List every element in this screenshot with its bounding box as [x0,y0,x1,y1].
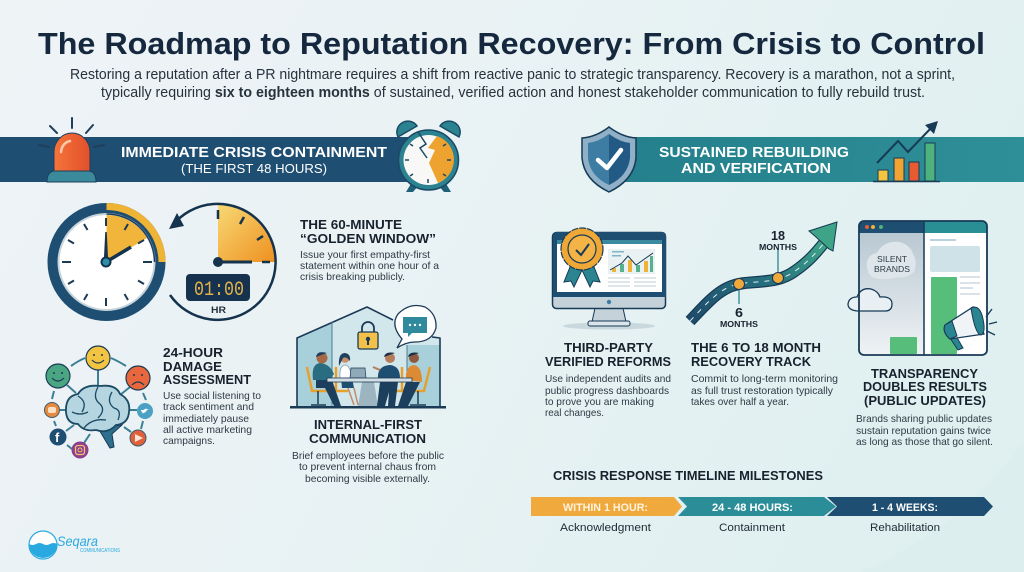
heading: timeline milestones: CRISIS RESPONSE TIMELINE MILESTONES [553,468,823,483]
illustration: internal meeting room [290,306,446,408]
icon: stopwatch countdown arc with digital display [169,204,276,320]
text block: 24-hour damage assessment: all active marketing [163,424,252,436]
intro text: Restoring a reputation after a PR nightmare requires a shift from reactive panic to strategic transparency. Recovery is a marathon, not a sprint, [70,67,955,83]
text block: third-party verified reforms: to prove you are making [545,396,654,408]
icon: clock with highlighted first hour [48,203,166,321]
text block: 60-minute golden window: THE 60-MINUTE [300,217,402,232]
text block: transparency doubles results: DOUBLES RESULTS [863,379,987,394]
logo: Seqara [57,533,98,549]
title: The Roadmap to Reputation Recovery: From Crisis to Control [38,26,985,61]
text block: transparency doubles results [856,366,993,448]
logo [29,531,121,559]
text block: transparency doubles results: (PUBLIC UPDATES) [864,393,986,408]
text block: 60-minute golden window: crisis breaking publicly. [300,271,405,283]
text block: 6 to 18 month recovery track: RECOVERY TRACK [691,354,812,369]
text block: internal-first communication: becoming visible externally. [305,473,430,485]
text block: 60-minute golden window: statement within one hour of a [300,260,439,272]
panel: sustained rebuilding banner: SUSTAINED REBUILDING [659,145,849,161]
chart: 6 to 18 month recovery road: MONTHS [720,320,759,329]
panel: sustained rebuilding banner: AND VERIFICATION [681,161,831,177]
timeline: crisis response chevrons [531,497,993,534]
text block: 60-minute golden window: Issue your first empathy-first [300,249,430,261]
text block: third-party verified reforms: Use independent audits and [545,373,671,385]
text block: 24-hour damage assessment: track sentiment and [163,401,254,413]
intro text [70,67,955,101]
text block: third-party verified reforms [545,340,671,419]
chevron: 1-4 weeks: 1 - 4 WEEKS: [872,502,938,514]
text block: 60-minute golden window [300,217,439,283]
icon: brain with sentiment and social network [44,346,153,458]
text block: internal-first communication: INTERNAL-FIRST [314,417,422,432]
panel: immediate crisis containment banner: (THE FIRST 48 HOURS) [181,161,327,176]
icon: cracked alarm clock [397,121,460,192]
chevron: 24-48 hours: 24 - 48 HOURS: [712,502,793,514]
icon: padlock [358,322,378,349]
panel: sustained rebuilding banner [625,137,1024,182]
text block: 6 to 18 month recovery track: THE 6 TO 18 MONTH [691,340,821,355]
illustration: split browser silent brands versus public updates [848,221,997,355]
chart: 6 to 18 month recovery road: 6 [735,305,743,320]
text block: 6 to 18 month recovery track: Commit to long-term monitoring [691,373,838,385]
text block: 6 to 18 month recovery track [691,340,838,408]
text block: internal-first communication [292,417,444,485]
text block: third-party verified reforms: VERIFIED REFORMS [545,354,671,369]
text block: third-party verified reforms: real changes. [545,407,604,419]
logo: COMMUNICATIONS [80,548,121,554]
chevron: 24-48 hours [678,497,836,534]
panel: immediate crisis containment banner: IMMEDIATE CRISIS CONTAINMENT [121,145,387,161]
icon: brain with sentiment and social network: f [55,430,60,445]
chevron: 24-48 hours: Containment [719,522,785,534]
text block: transparency doubles results: sustain reputation gains twice [856,425,991,437]
chart: 6 to 18 month recovery road: MONTHS [759,243,798,252]
text block: internal-first communication: COMMUNICATION [309,431,426,446]
text block: third-party verified reforms: public progress dashboards [545,385,669,397]
icon: monitor with award badge [552,228,666,330]
text block: 6 to 18 month recovery track: as full trust restoration typically [691,385,834,397]
text block: transparency doubles results: Brands sharing public updates [856,413,992,425]
text block: internal-first communication: Brief employees before the public [292,450,444,462]
icon: stopwatch countdown arc with digital display: 01:00 [194,279,244,302]
chevron: 1-4 weeks: Rehabilitation [870,522,940,534]
chevron: within 1 hour: Acknowledgment [560,522,651,534]
text block: 24-hour damage assessment: immediately pause [163,413,249,425]
icon: shield with check [582,127,636,192]
text block: 24-hour damage assessment [163,345,261,447]
text block: transparency doubles results: TRANSPARENCY [871,366,978,381]
icon: rising bar chart [873,121,940,182]
illustration: split browser silent brands versus public updates: BRANDS [874,264,910,274]
chevron: within 1 hour: WITHIN 1 HOUR: [563,502,648,514]
text block: 24-hour damage assessment: 24-HOUR [163,345,224,360]
text block: 24-hour damage assessment: campaigns. [163,435,215,447]
intro text: typically requiring six to eighteen months of sustained, verified action and honest stakeholder communication to fully rebuild trust. [101,85,925,101]
text block: 24-hour damage assessment: DAMAGE [163,359,222,374]
panel: immediate crisis containment banner [0,137,412,182]
chart: 6 to 18 month recovery road: 18 [771,228,785,243]
icon: siren [39,118,104,182]
icon: stopwatch countdown arc with digital display: HR [211,305,227,315]
chart: 6 to 18 month recovery road [690,222,837,329]
text block: 24-hour damage assessment: Use social listening to [163,390,261,402]
text block: 60-minute golden window: “GOLDEN WINDOW” [300,231,436,246]
text block: transparency doubles results: as long as those that go silent. [856,436,993,448]
chevron: 1-4 weeks [827,497,993,534]
text block: 6 to 18 month recovery track: takes over half a year. [691,396,789,408]
text block: 24-hour damage assessment: ASSESSMENT [163,372,251,387]
text block: third-party verified reforms: THIRD-PARTY [564,340,653,355]
chevron: within 1 hour [531,497,682,534]
illustration: split browser silent brands versus public updates: SILENT [877,254,907,264]
text block: internal-first communication: to prevent internal chaus from [299,461,436,473]
icon: speech bubble [395,306,436,348]
